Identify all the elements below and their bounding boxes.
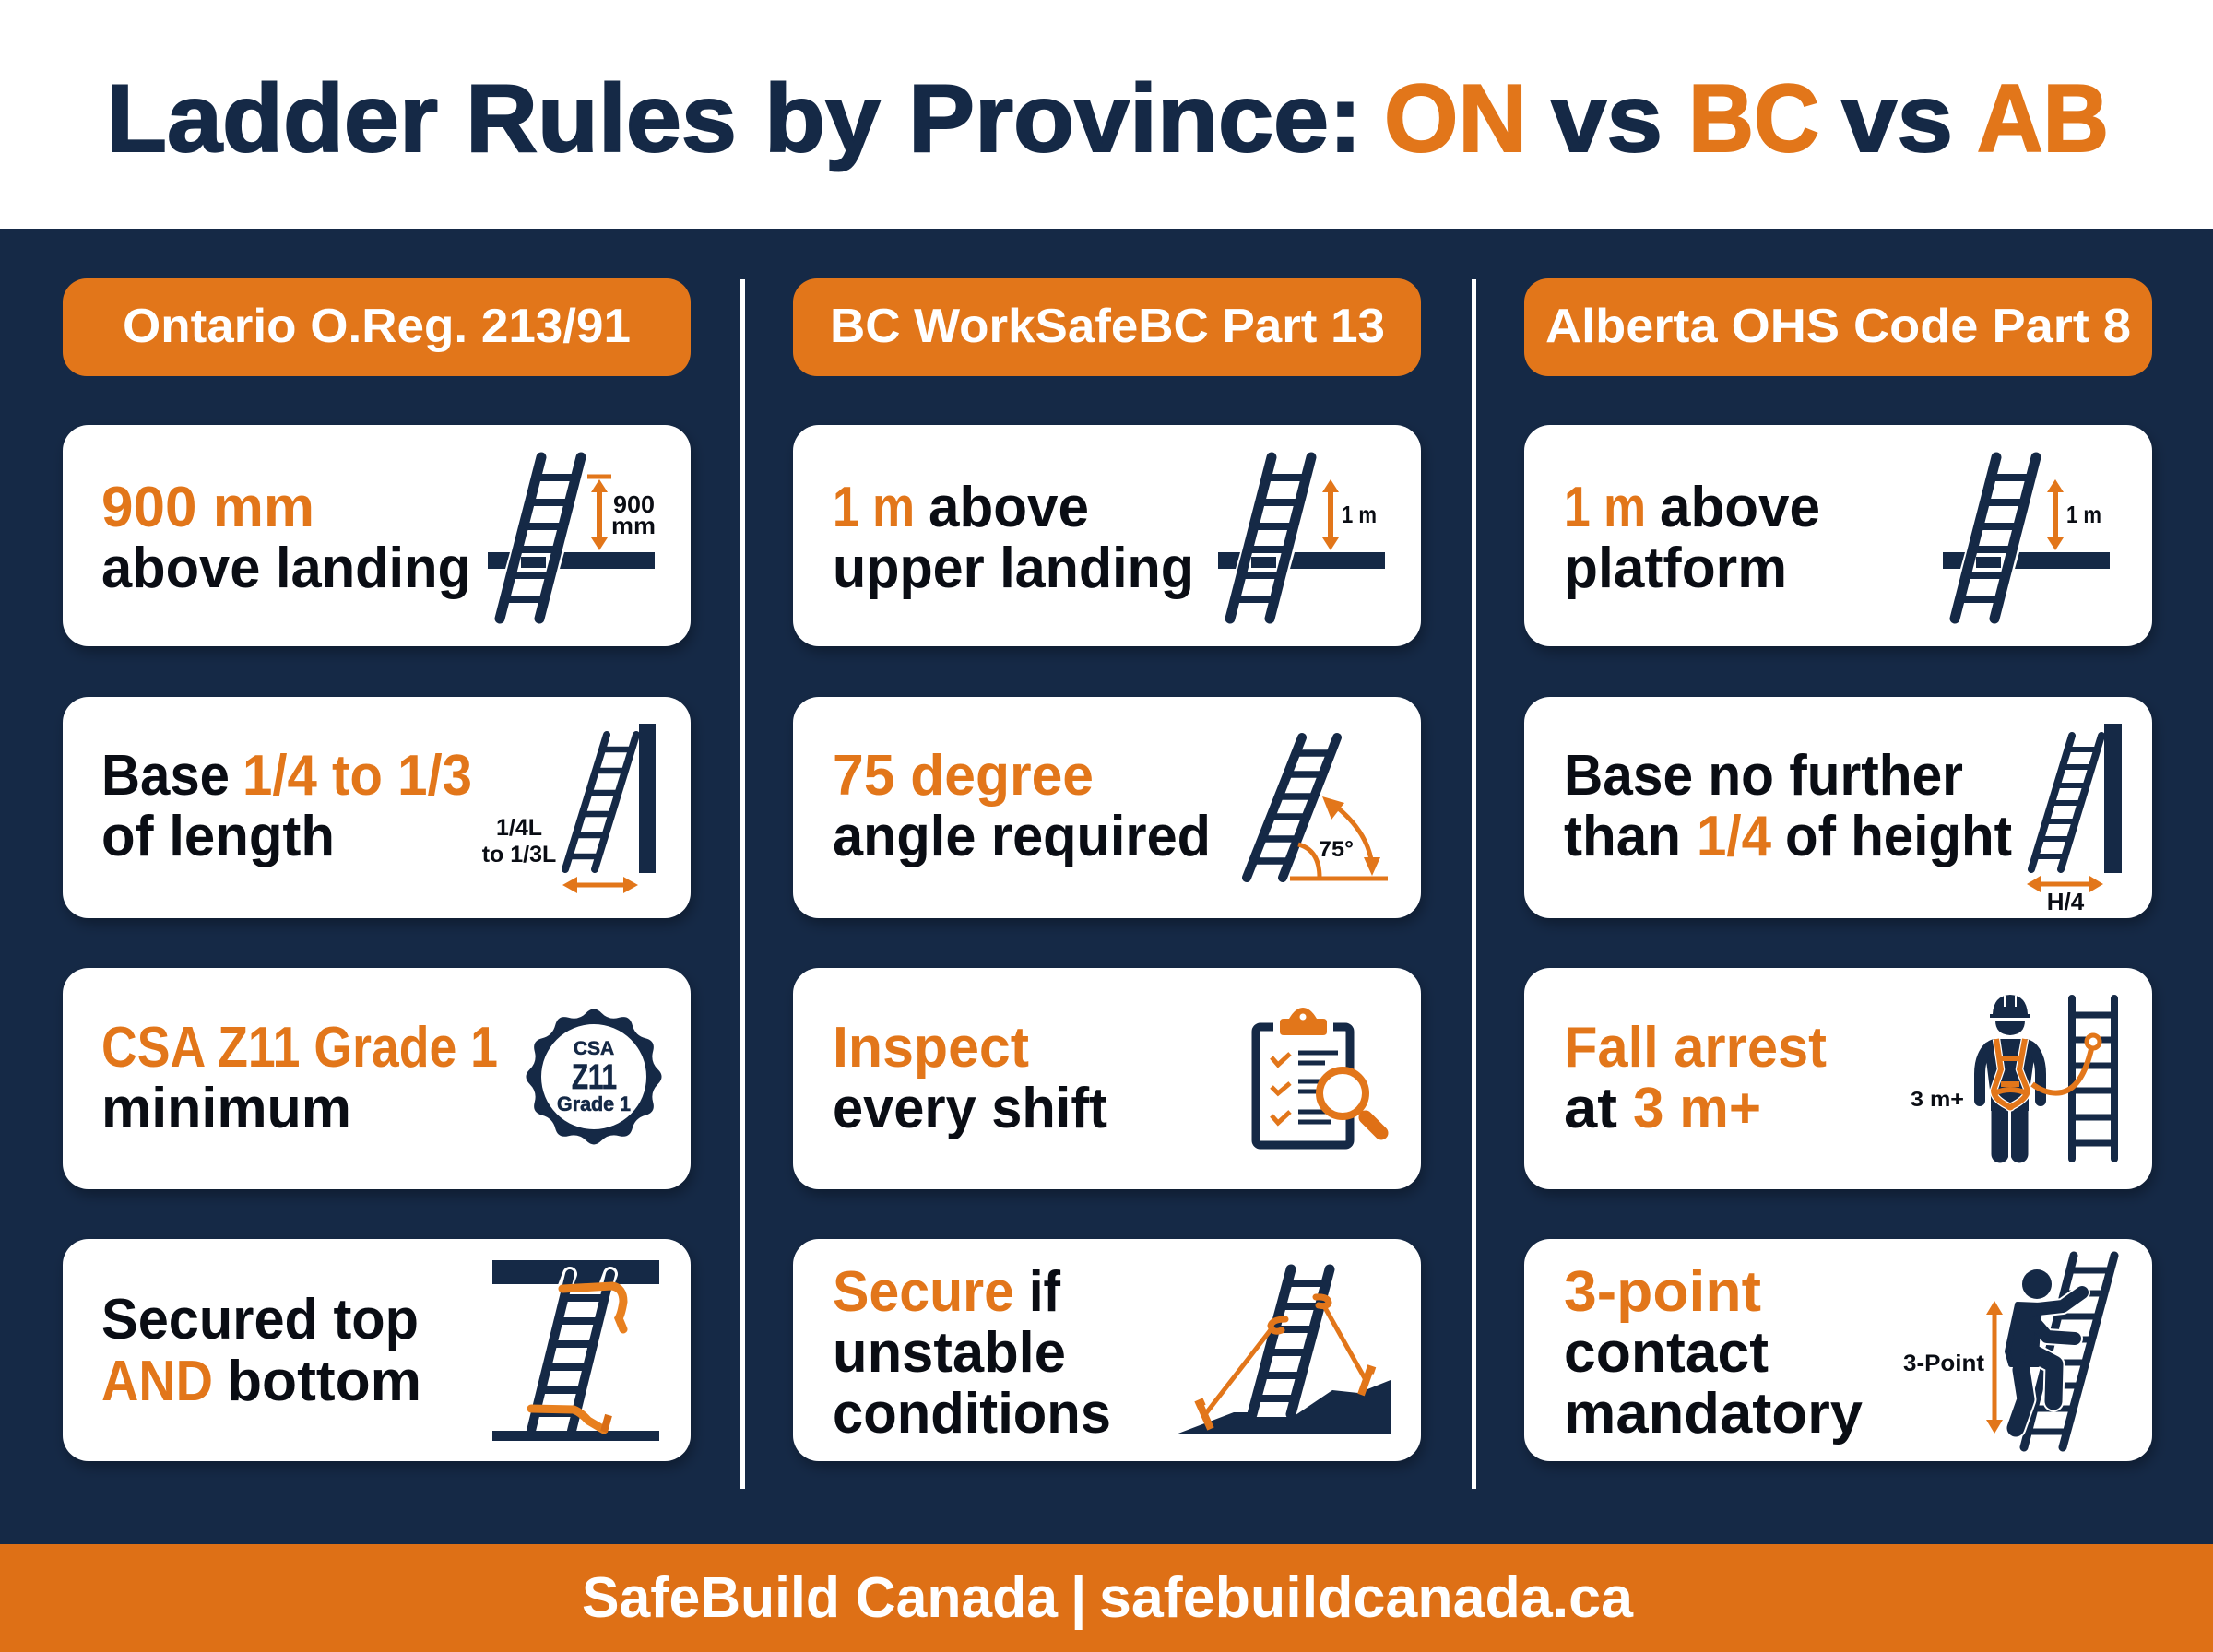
panel: Ontario 900 mm <box>63 425 691 646</box>
heading: BC <box>793 278 1421 376</box>
title: ON <box>1384 65 1527 172</box>
icon: CSA badge: Z11 <box>572 1058 617 1097</box>
text: 1 m above upper landing <box>833 476 1194 600</box>
text: Secure if unstable conditions <box>833 1260 1111 1446</box>
text: 1 m above upper landing: above <box>929 476 1089 539</box>
text: 1 m above platform: 1 m <box>1564 476 1646 539</box>
heading: Alberta: Alberta OHS Code Part 8 <box>1545 300 2131 353</box>
column divider right <box>1472 279 1476 1489</box>
icon: ladder against wall with base ratio: to 1/3L <box>482 842 556 867</box>
icon: ladder against wall with base ratio <box>482 724 656 893</box>
text: Base 1/4 to 1/3 of length: 1/4 to 1/3 <box>243 744 472 808</box>
title: vs <box>1841 65 1953 172</box>
panel: Alberta base 1/4 height <box>1524 697 2152 918</box>
text: 1 m above platform <box>1564 476 1820 600</box>
icon: ladder against wall with base ratio: 1/4L <box>496 815 542 841</box>
icon: worker with harness and ladder: 3 m+ <box>1911 1087 1964 1111</box>
text: 3-point contact mandatory: mandatory <box>1564 1382 1864 1446</box>
text: Base no further than 1/4 of height: than <box>1564 805 1681 868</box>
text: Base no further than 1/4 of height: 1/4 <box>1697 805 1771 868</box>
icon: worker with harness and ladder <box>1911 995 2114 1163</box>
text: Base 1/4 to 1/3 of length: of length <box>101 805 335 868</box>
icon: ladder above platform 1 m <box>1943 457 2110 619</box>
panel: Alberta fall arrest <box>1524 968 2152 1189</box>
text: Inspect every shift <box>833 1016 1107 1140</box>
title: Ladder Rules by Province: <box>106 65 1362 172</box>
heading: Ontario: Ontario O.Reg. 213/91 <box>123 300 631 353</box>
footer: SafeBuild Canada <box>582 1566 1059 1630</box>
text: Secure if unstable conditions: Secure <box>833 1260 1014 1324</box>
text: 1 m above platform: platform <box>1564 537 1787 600</box>
text: CSA Z11 Grade 1 minimum <box>101 1016 498 1140</box>
icon: CSA badge <box>526 1009 662 1144</box>
title <box>106 65 2109 172</box>
text: Base no further than 1/4 of height <box>1564 744 2012 868</box>
icon: ladder above landing 1 m <box>1218 457 1385 619</box>
text: 3-point contact mandatory: 3-point <box>1564 1260 1761 1324</box>
text: Base 1/4 to 1/3 of length <box>101 744 472 868</box>
text: 75 degree angle required: 75 degree <box>833 744 1094 808</box>
text: Base no further than 1/4 of height: of height <box>1785 805 2012 868</box>
footer: safebuildcanada.ca <box>1099 1566 1634 1630</box>
icon: ladder against wall H/4 <box>2027 724 2122 915</box>
icon: ladder at 75 degrees <box>1247 738 1388 879</box>
icon: ladder above platform 1 m: 1 m <box>2066 501 2101 528</box>
footer: | <box>1071 1566 1086 1631</box>
icon: CSA badge: Grade 1 <box>557 1092 631 1115</box>
column divider left <box>740 279 745 1489</box>
background: white header <box>0 0 2213 229</box>
text: Secured top AND bottom: bottom <box>227 1350 421 1413</box>
icon: ladder with guy ropes on uneven ground <box>1176 1269 1391 1434</box>
panel: Ontario base ratio <box>63 697 691 918</box>
heading: Alberta <box>1524 278 2152 376</box>
text: 3-point contact mandatory <box>1564 1260 1864 1446</box>
text: Secured top AND bottom: AND <box>101 1350 213 1413</box>
panel: Alberta 3-point <box>1524 1239 2152 1461</box>
text: 1 m above upper landing: 1 m <box>833 476 915 539</box>
text: 75 degree angle required: angle required <box>833 805 1211 868</box>
text: 1 m above upper landing: upper landing <box>833 537 1194 600</box>
text: Fall arrest at 3 m+: 3 m+ <box>1633 1077 1761 1140</box>
panel: Ontario secured <box>63 1239 691 1461</box>
icon: climber on ladder with 3-point arrow <box>1903 1256 2114 1447</box>
footer <box>0 1544 2213 1652</box>
text: Base no further than 1/4 of height: Base no further <box>1564 744 1963 808</box>
text: Secure if unstable conditions: if <box>1029 1260 1060 1324</box>
panel: BC 75 degree <box>793 697 1421 918</box>
panel: BC inspect <box>793 968 1421 1189</box>
icon: climber on ladder with 3-point arrow: 3-Point <box>1903 1351 1985 1376</box>
text: Secured top AND bottom <box>101 1288 421 1413</box>
panel: Alberta 1 m platform <box>1524 425 2152 646</box>
text: Base 1/4 to 1/3 of length: Base <box>101 744 230 808</box>
text: Secure if unstable conditions: unstable <box>833 1321 1066 1385</box>
text: Inspect every shift: every shift <box>833 1077 1107 1140</box>
text: CSA Z11 Grade 1 minimum: CSA Z11 Grade 1 <box>101 1016 498 1080</box>
icon: ladder against wall H/4: H/4 <box>2047 888 2085 915</box>
title: vs <box>1551 65 1663 172</box>
text: Fall arrest at 3 m+ <box>1564 1016 1827 1140</box>
heading: BC: BC WorkSafeBC Part 13 <box>830 300 1385 353</box>
panel: Ontario CSA Z11 <box>63 968 691 1189</box>
text: 1 m above platform: above <box>1660 476 1820 539</box>
icon: clipboard and magnifier <box>1256 1008 1381 1145</box>
icon: ladder above landing 900 mm: mm <box>611 512 656 539</box>
title: BC <box>1688 65 1819 172</box>
text: 3-point contact mandatory: contact <box>1564 1321 1769 1385</box>
text: Fall arrest at 3 m+: Fall arrest <box>1564 1016 1827 1080</box>
text: 900 mm above landing <box>101 476 471 600</box>
text: 75 degree angle required <box>833 744 1211 868</box>
background: navy main panel <box>0 229 2213 1544</box>
text: Secure if unstable conditions: conditions <box>833 1382 1111 1446</box>
icon: ladder at 75 degrees: 75° <box>1319 837 1354 862</box>
icon: ladder above landing 900 mm: 900 <box>613 490 655 518</box>
text: Inspect every shift: Inspect <box>833 1016 1029 1080</box>
text: 900 mm above landing: 900 mm <box>101 476 314 539</box>
text: Fall arrest at 3 m+: at <box>1564 1077 1617 1140</box>
text: Secured top AND bottom: Secured top <box>101 1288 419 1351</box>
panel: BC 1 m upper landing <box>793 425 1421 646</box>
icon: ladder above landing 1 m: 1 m <box>1342 501 1377 528</box>
icon: CSA badge: CSA <box>574 1038 614 1059</box>
icon: ladder above landing 900 mm <box>488 457 656 619</box>
text: CSA Z11 Grade 1 minimum: minimum <box>101 1077 351 1140</box>
heading: Ontario <box>63 278 691 376</box>
panel: BC secure <box>793 1239 1421 1461</box>
icon: ladder tied top and bottom <box>492 1260 659 1441</box>
text: 900 mm above landing: above landing <box>101 537 471 600</box>
title: AB <box>1977 65 2109 172</box>
